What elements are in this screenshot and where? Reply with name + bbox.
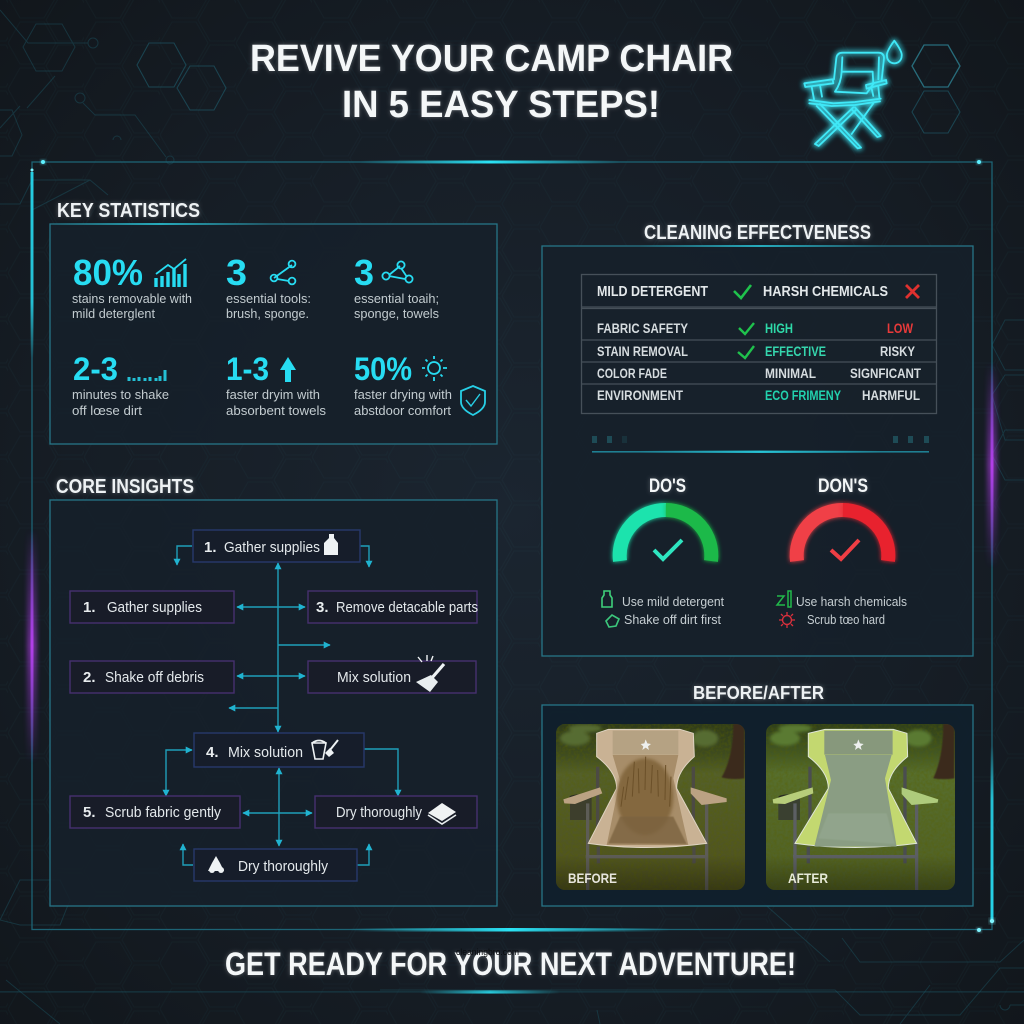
stat: 2-3 minutes: 2-3 — [73, 351, 118, 387]
stat: 50 percent: abstdoor comfort — [354, 403, 451, 418]
step: remove detachable parts: Remove detacable parts — [336, 600, 478, 616]
photo: clean chair after — [766, 724, 955, 890]
step: shake off debris — [70, 661, 234, 693]
do's list: Use mild detergent — [622, 595, 725, 609]
step: remove detachable parts: 3. — [316, 599, 329, 616]
step: gather supplies top: Gather supplies — [224, 540, 320, 556]
stat: 50 percent: 50% — [354, 351, 412, 387]
watermark: cleaningbro.com — [456, 947, 519, 958]
title: IN 5 EASY STEPS! — [342, 84, 660, 126]
stat: 80 percent: 80% — [73, 252, 143, 293]
stat: 2-3 minutes: minutes to shake — [72, 387, 169, 402]
stat: 1-3 drying: 1-3 — [226, 351, 269, 387]
label: before: BEFORE — [568, 870, 617, 886]
comparison table: HIGH — [765, 321, 793, 336]
stat: 3 towels: 3 — [354, 252, 374, 293]
step: scrub fabric gently: 5. — [83, 804, 96, 821]
panel: cleaning effectiveness — [542, 245, 973, 656]
step: dry thoroughly — [194, 849, 357, 881]
heading: core insights: CORE INSIGHTS — [56, 476, 194, 498]
comparison table: HARMFUL — [862, 388, 920, 403]
panel: before/after — [542, 705, 973, 906]
do's heading: DO'S — [649, 476, 686, 497]
step: dry thoroughly: Dry thoroughly — [238, 859, 329, 875]
step: mix solution — [194, 733, 364, 767]
gauge: don'ts — [797, 510, 888, 561]
stat: 2-3 minutes: off lœse dirt — [72, 403, 142, 418]
don'ts list — [777, 591, 907, 628]
icon: neon camp chair with water drop — [804, 41, 902, 148]
heading: cleaning effectiveness: CLEANING EFFECTVENESS — [644, 222, 871, 244]
stat: 3 tools: brush, sponge. — [226, 306, 309, 321]
comparison table: LOW — [887, 321, 913, 336]
comparison table: ENVIRONMENT — [597, 388, 684, 403]
step: gather supplies: 1. — [83, 599, 96, 616]
step: mix solution with brush — [308, 655, 476, 693]
stat: 2-3 minutes — [72, 351, 169, 418]
step: gather supplies top — [193, 530, 360, 562]
title — [250, 38, 733, 126]
step: gather supplies top: 1. — [204, 539, 217, 556]
comparison table: FABRIC SAFETY — [597, 321, 688, 336]
label: after: AFTER — [788, 870, 828, 886]
step: remove detachable parts — [308, 591, 478, 623]
comparison table: MINIMAL — [765, 366, 816, 381]
heading: before/after: BEFORE/AFTER — [693, 683, 824, 703]
step: gather supplies: Gather supplies — [107, 600, 202, 616]
flow arrows — [166, 546, 398, 865]
comparison table: COLOR FADE — [597, 366, 667, 381]
stat: 1-3 drying: absorbent towels — [226, 403, 327, 418]
stat: 1-3 drying — [226, 351, 327, 418]
step: scrub fabric gently: Scrub fabric gently — [105, 805, 222, 821]
stat: 50 percent — [354, 351, 485, 418]
step: mix solution: Mix solution — [228, 745, 303, 761]
comparison table: RISKY — [880, 344, 915, 359]
stat: 3 tools: 3 — [226, 252, 247, 293]
step: shake off debris: Shake off debris — [105, 670, 204, 686]
stat: 3 tools — [226, 252, 311, 321]
title: REVIVE YOUR CAMP CHAIR — [250, 38, 733, 80]
step: gather supplies — [70, 591, 234, 623]
step: scrub fabric gently — [70, 796, 240, 828]
step: mix solution: 4. — [206, 744, 219, 761]
footer message: GET READY FOR YOUR NEXT ADVENTURE! — [225, 946, 796, 982]
panel: key statistics — [50, 223, 497, 444]
comparison table: STAIN REMOVAL — [597, 344, 688, 359]
don'ts heading: DON'S — [818, 476, 868, 497]
comparison table: HARSH CHEMICALS — [763, 284, 888, 300]
step: dry thoroughly with towel: Dry thoroughly — [336, 805, 423, 821]
step: dry thoroughly with towel — [315, 796, 477, 828]
step: mix solution with brush: Mix solution — [337, 670, 411, 686]
stat: 80 percent: stains removable with — [72, 291, 192, 306]
step: shake off debris: 2. — [83, 669, 96, 686]
stat: 50 percent: faster drying with — [354, 387, 452, 402]
comparison table: SIGNFICANT — [850, 366, 922, 381]
comparison table: MILD DETERGENT — [597, 284, 708, 300]
panel: core insights flowchart — [50, 500, 497, 906]
comparison table: EFFECTIVE — [765, 344, 826, 359]
gauge: do's — [620, 510, 711, 561]
stat: 1-3 drying: faster dryim with — [226, 387, 320, 402]
stat: 80 percent — [72, 252, 192, 321]
photo: dirty chair before — [556, 724, 745, 890]
comparison table: ECO FRIMENY — [765, 388, 841, 403]
stat: 3 towels: essential toaih; — [354, 291, 439, 306]
heading: key statistics: KEY STATISTICS — [57, 200, 200, 222]
comparison table — [582, 274, 936, 414]
stat: 3 towels: sponge, towels — [354, 306, 439, 321]
stat: 80 percent: mild deterglent — [72, 306, 155, 321]
stat: 3 tools: essential tools: — [226, 291, 311, 306]
don'ts list: Scrub tœo hard — [807, 613, 885, 627]
stat: 3 towels — [354, 252, 439, 321]
do's list — [602, 591, 725, 627]
don'ts list: Use harsh chemicals — [796, 595, 907, 609]
do's list: Shake off dirt first — [624, 613, 722, 627]
